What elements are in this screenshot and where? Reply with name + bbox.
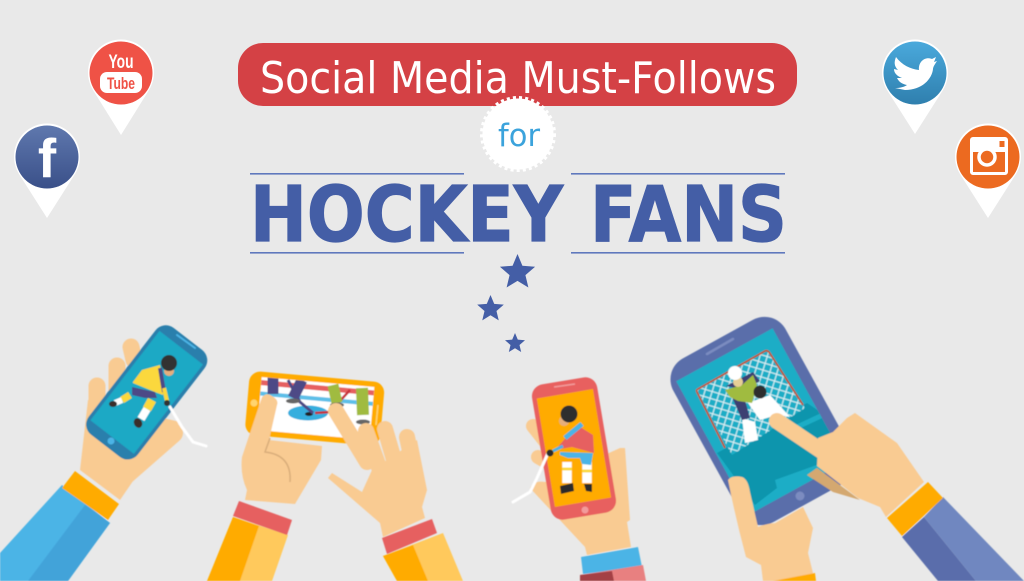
icon: twitter pin xyxy=(882,40,948,134)
hand: holding red phone xyxy=(530,426,631,555)
player: goalie xyxy=(725,366,790,443)
stars xyxy=(477,254,535,352)
device: red phone xyxy=(530,375,618,522)
heading: hockey fans xyxy=(250,171,787,260)
device: tablet xyxy=(670,316,842,526)
hand: right fingers and palm xyxy=(328,411,427,537)
goal net xyxy=(697,350,805,455)
icon: facebook pin: f xyxy=(38,127,57,189)
illustration: hands and devices xyxy=(0,308,1024,581)
arm: left yellow sleeve xyxy=(207,501,292,581)
device: orange phone xyxy=(244,370,385,450)
hockey stick xyxy=(513,453,548,502)
hand: left palm behind tablet xyxy=(746,507,815,581)
badge: for xyxy=(482,98,554,170)
badge: for: for xyxy=(498,118,540,154)
heading: hockey fans: FANS xyxy=(590,171,787,260)
arm: blue sleeve xyxy=(887,482,1024,581)
icon: facebook pin xyxy=(14,124,80,218)
hand: left thumb and palm xyxy=(242,394,322,504)
hand with red phone xyxy=(513,375,646,581)
arm: right yellow sleeve xyxy=(382,519,463,581)
hands with tablet xyxy=(662,308,1024,581)
icon: youtube pin xyxy=(88,40,154,135)
heading: hockey fans: HOCKEY xyxy=(250,171,564,260)
icon: instagram pin xyxy=(955,124,1021,218)
device: blue phone xyxy=(81,320,213,465)
arm: blue cuff and red sleeve xyxy=(580,547,646,581)
arm: blue sleeve xyxy=(0,471,119,581)
hockey stick xyxy=(170,407,206,446)
player: yellow skater xyxy=(109,355,177,429)
icon: youtube pin: Tube xyxy=(107,74,135,93)
title banner: Social Media Must-Follows xyxy=(260,53,776,104)
hand: left thumb over tablet xyxy=(728,476,793,570)
hand: pointing finger and palm xyxy=(777,413,924,517)
player: red skater xyxy=(546,406,594,494)
hand: holding blue phone xyxy=(80,347,180,500)
hand with blue phone xyxy=(0,320,213,581)
cuff: tablet left hand xyxy=(773,573,816,581)
hands with orange phone xyxy=(207,370,463,581)
icon: youtube pin: You xyxy=(108,51,134,73)
